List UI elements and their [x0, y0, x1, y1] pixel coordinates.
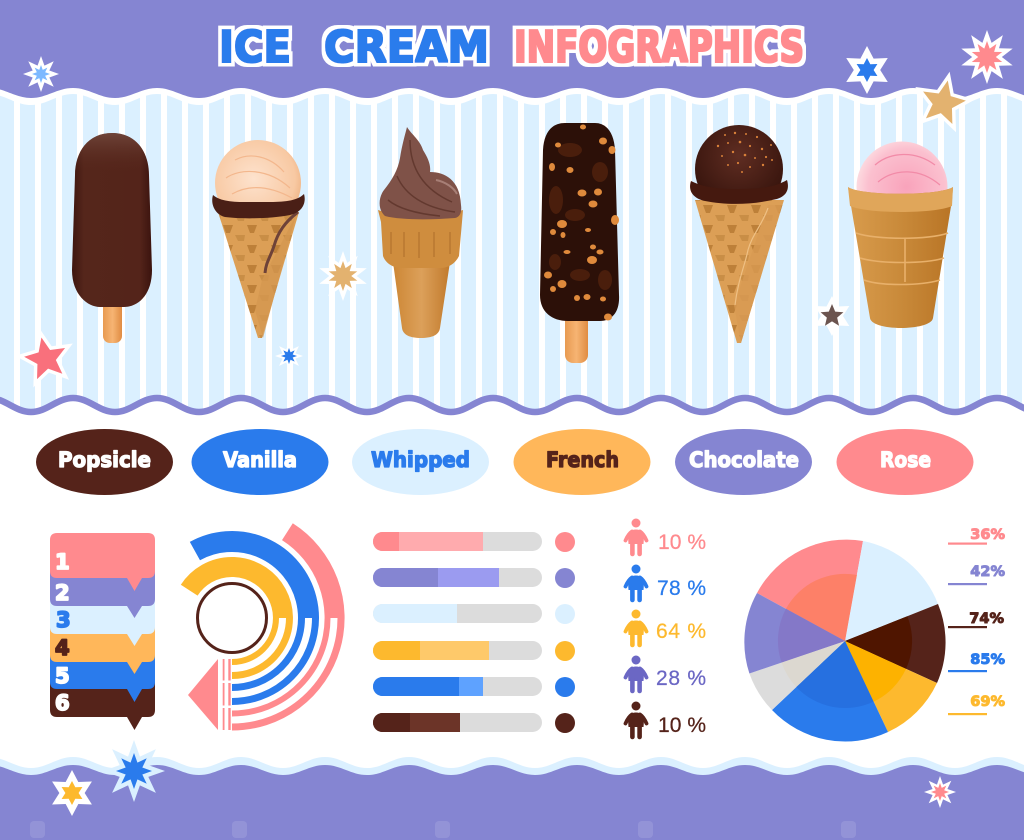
pie legend: 85% — [970, 652, 1005, 668]
bar row 1 — [373, 532, 575, 552]
title: CREAM — [324, 22, 489, 73]
icon: stars top — [23, 30, 1013, 135]
flavor pill: French — [514, 429, 650, 495]
person 28 percent violet: 28 % — [656, 667, 706, 690]
pie legend: 74% — [969, 611, 1004, 627]
person 10 percent brown: 10 % — [658, 714, 706, 737]
title — [219, 22, 804, 73]
purple wavy divider — [0, 398, 1024, 412]
icon: stars bottom — [52, 740, 956, 816]
flavor pill: Popsicle — [36, 429, 173, 495]
flavor pill: Vanilla — [192, 429, 328, 495]
flavor pill: Chocolate: Chocolate — [689, 448, 799, 472]
pie legend: 69% — [970, 694, 1005, 710]
numbered speech-bubble stack: 1 — [55, 550, 70, 574]
person 78 percent blue — [626, 564, 706, 600]
top purple banner — [0, 0, 1024, 98]
bar row 2 — [373, 568, 575, 588]
person 28 percent violet — [626, 656, 706, 691]
faint watermark marks — [30, 821, 856, 838]
person 64 percent yellow — [626, 610, 706, 645]
pie chart — [744, 540, 946, 741]
numbered speech-bubble stack — [50, 533, 155, 730]
flavor pill: Whipped — [352, 429, 489, 495]
flavor pill: French: French — [546, 448, 619, 472]
pie legend: 36% — [970, 527, 1005, 543]
numbered speech-bubble stack: 4 — [55, 636, 70, 660]
radial arc chart — [188, 532, 335, 730]
person statistics — [626, 518, 706, 737]
person 64 percent yellow: 64 % — [656, 620, 706, 643]
rose ice cream cup — [848, 142, 953, 328]
progress bars — [373, 532, 575, 733]
soft serve cone — [378, 127, 463, 338]
bar row 3 — [373, 604, 575, 624]
numbered speech-bubble stack: 3 — [56, 608, 71, 632]
person 78 percent blue: 78 % — [657, 577, 706, 600]
bar row 6 — [373, 713, 575, 733]
flavor pill: Rose — [836, 429, 974, 495]
person 10 percent pink: 10 % — [658, 531, 706, 554]
title: INFOGRAPHICS — [514, 22, 804, 73]
popsicle — [72, 133, 152, 343]
flavor pill: Vanilla: Vanilla — [223, 448, 297, 472]
flavor pill: Rose: Rose — [880, 448, 931, 472]
bar row 4 — [373, 641, 575, 661]
pie legend — [948, 527, 1005, 715]
striped background — [0, 88, 1024, 418]
nut chocolate popsicle — [540, 123, 619, 363]
numbered speech-bubble stack: 5 — [55, 664, 70, 688]
top white wave band — [0, 0, 1024, 105]
chocolate cone — [690, 125, 788, 343]
bottom light-blue wave band — [0, 757, 1024, 840]
flavor pill: Popsicle: Popsicle — [58, 448, 151, 472]
flavor pill: Whipped: Whipped — [371, 448, 470, 472]
person 10 percent brown — [626, 702, 706, 737]
white lower panel — [0, 398, 1024, 840]
numbered speech-bubble stack: 2 — [55, 581, 70, 605]
flavor pill: Chocolate — [675, 429, 812, 495]
numbered speech-bubble stack: 6 — [55, 691, 70, 715]
title: ICE — [219, 22, 291, 73]
bottom purple banner — [0, 765, 1024, 840]
vanilla cone — [212, 140, 305, 338]
pie legend: 42% — [970, 564, 1005, 580]
bar row 5 — [373, 677, 575, 697]
icon: stars mid — [11, 251, 849, 390]
person 10 percent pink — [626, 518, 706, 554]
